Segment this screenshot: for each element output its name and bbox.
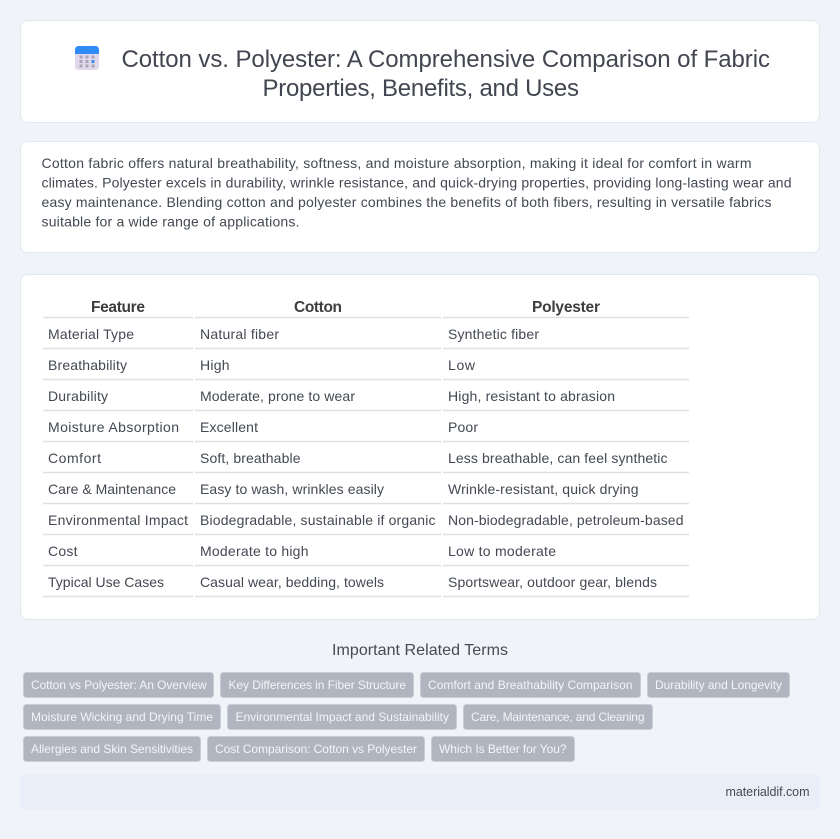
row: environmental impact: Environmental Impact	[48, 512, 188, 528]
tag: Durability and Longevity	[655, 678, 782, 692]
tag: Comfort and Breathability Comparison	[428, 678, 632, 692]
row: environmental impact	[48, 512, 684, 528]
tag	[220, 672, 414, 698]
footer bar	[20, 775, 820, 809]
row: environmental impact: Biodegradable, sustainable if organic	[200, 512, 436, 528]
description text: climates. Polyester excels in durability, wrinkle resistance, and quick-drying properties, providing long-lasting wear and	[42, 174, 792, 190]
tag: Cotton vs Polyester: An Overview	[31, 678, 207, 692]
row: cost	[48, 543, 556, 559]
row: comfort: Comfort	[48, 450, 101, 466]
row: typical use cases: Sportswear, outdoor gear, blends	[448, 574, 657, 590]
tag: Cost Comparison: Cotton vs Polyester	[215, 742, 417, 756]
row: breathability: High	[200, 357, 230, 373]
row: material type: Synthetic fiber	[448, 326, 539, 342]
row: moisture absorption: Poor	[448, 419, 478, 435]
row: typical use cases: Casual wear, bedding, towels	[200, 574, 384, 590]
tag: Environmental Impact and Sustainability	[236, 710, 449, 724]
row: comfort	[48, 450, 668, 466]
heading: important related terms: Important Related Terms	[332, 642, 508, 659]
row: cost: Cost	[48, 543, 78, 559]
row: material type	[48, 326, 539, 342]
description text: easy maintenance. Blending cotton and polyester combines the benefits of both fibers, resulting in versatile fabrics	[42, 194, 772, 210]
tag	[24, 704, 220, 730]
row: breathability: Low	[448, 357, 476, 373]
row: care and maintenance: Care & Maintenance	[48, 481, 176, 497]
description text: suitable for a wide range of applications.	[42, 214, 300, 230]
icon: calendar	[75, 46, 99, 70]
table header row: Polyester	[532, 299, 600, 316]
tag	[24, 672, 214, 698]
tag	[208, 736, 424, 762]
tag	[432, 736, 574, 762]
panel: description	[20, 142, 820, 252]
row: durability: Durability	[48, 388, 108, 404]
panel: header	[20, 20, 820, 122]
tag: Moisture Wicking and Drying Time	[31, 710, 213, 724]
row: moisture absorption: Excellent	[200, 419, 258, 435]
row: breathability: Breathability	[48, 357, 127, 373]
tag: Which Is Better for You?	[439, 742, 567, 756]
tag: Key Differences in Fiber Structure	[228, 678, 406, 692]
panel: comparison table	[20, 274, 820, 620]
title: Cotton vs. Polyester: A Comprehensive Comparison of Fabric	[122, 46, 770, 73]
row: durability: High, resistant to abrasion	[448, 388, 615, 404]
description text	[42, 155, 792, 230]
related term tags	[24, 672, 790, 762]
table header row: Feature	[91, 299, 145, 316]
tag	[24, 736, 200, 762]
row: durability	[48, 388, 615, 404]
row: material type: Material Type	[48, 326, 134, 342]
row: moisture absorption	[48, 419, 478, 435]
row: material type: Natural fiber	[200, 326, 279, 342]
tag: Allergies and Skin Sensitivities	[31, 742, 193, 756]
row: cost: Low to moderate	[448, 543, 556, 559]
table header row	[91, 299, 600, 316]
row: care and maintenance	[48, 481, 638, 497]
table header row: Cotton	[294, 299, 342, 316]
row: moisture absorption: Moisture Absorption	[48, 419, 179, 435]
tag	[420, 672, 640, 698]
title: Properties, Benefits, and Uses	[262, 75, 579, 102]
tag	[648, 672, 790, 698]
row: care and maintenance: Wrinkle-resistant, quick drying	[448, 481, 638, 497]
row: comfort: Less breathable, can feel synthetic	[448, 450, 668, 466]
footer bar: materialdif.com	[726, 785, 810, 799]
row: typical use cases	[48, 574, 657, 590]
tag: Care, Maintenance, and Cleaning	[471, 710, 644, 724]
row: cost: Moderate to high	[200, 543, 308, 559]
row: environmental impact: Non-biodegradable, petroleum-based	[448, 512, 684, 528]
row: typical use cases: Typical Use Cases	[48, 574, 164, 590]
row: comfort: Soft, breathable	[200, 450, 301, 466]
row: breathability	[48, 357, 476, 373]
tag	[228, 704, 456, 730]
row: care and maintenance: Easy to wash, wrinkles easily	[200, 481, 384, 497]
description text: Cotton fabric offers natural breathability, softness, and moisture absorption, making it ideal for comfort in warm	[42, 155, 752, 171]
tag	[464, 704, 652, 730]
row: durability: Moderate, prone to wear	[200, 388, 355, 404]
title	[122, 46, 770, 102]
